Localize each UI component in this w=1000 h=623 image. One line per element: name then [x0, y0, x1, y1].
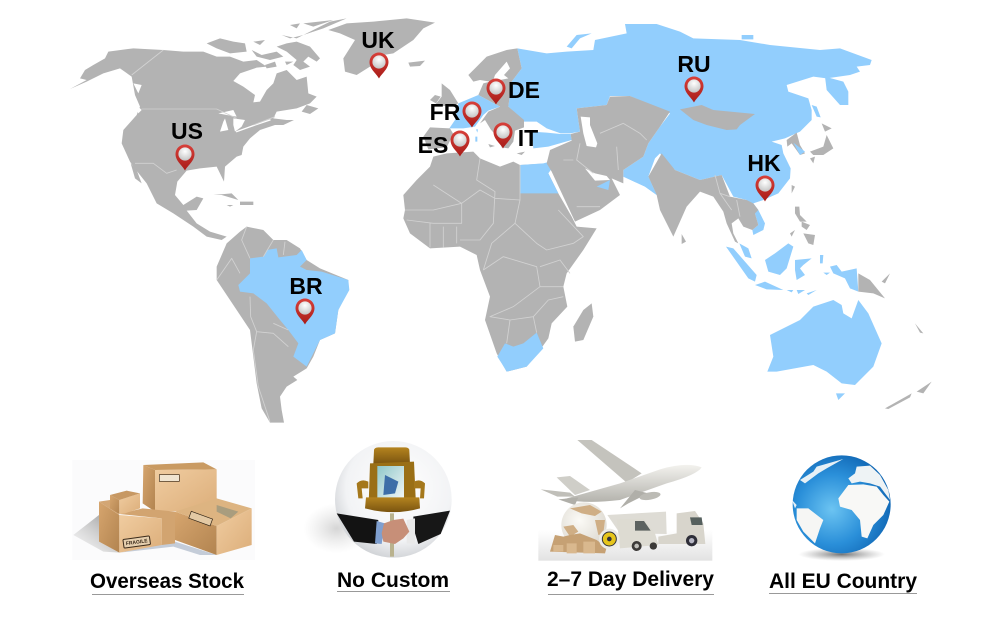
pin: HK — [747, 150, 781, 202]
pin: DE — [486, 77, 540, 104]
pin: BR: BR — [289, 273, 323, 299]
pin: RU: RU — [677, 51, 711, 77]
pin: US — [171, 118, 203, 170]
region: Mongolia — [680, 105, 755, 130]
icon: cardboard boxes — [72, 460, 255, 560]
region: New Zealand — [885, 323, 932, 409]
pin: ES: ES — [418, 132, 448, 158]
region: South Africa — [497, 333, 543, 372]
pin: FR — [430, 99, 482, 128]
pin: RU — [677, 51, 711, 102]
label: fragile sticker — [123, 536, 151, 548]
region: Egypt — [520, 159, 558, 193]
region: Africa — [403, 152, 597, 372]
pin: IT: IT — [518, 125, 538, 151]
world map — [70, 18, 932, 423]
pin: IT — [494, 122, 538, 151]
pin: ES — [418, 130, 470, 158]
region: Papua New Guinea — [858, 273, 890, 298]
region: Korea — [787, 133, 805, 155]
region: Greenland — [328, 18, 435, 75]
pin: US: US — [171, 118, 203, 144]
region: Central Asia and Middle East — [547, 96, 670, 222]
icon: blue globe — [792, 455, 891, 561]
region: North America — [70, 18, 347, 240]
region: Japan, Taiwan and Philippines — [790, 123, 833, 245]
pin: DE: DE — [508, 77, 540, 103]
pin: UK — [361, 27, 395, 78]
region: Indonesia — [726, 243, 858, 295]
pin: FR: FR — [430, 99, 461, 125]
region: Brazil — [238, 248, 349, 367]
region: South America — [217, 227, 349, 423]
label: Overseas Stock: Overseas Stock — [90, 570, 244, 593]
label: No Custom: No Custom — [337, 569, 449, 592]
region: Madagascar — [573, 303, 593, 342]
label: All EU Country: All EU Country — [769, 570, 917, 593]
region: Russia and China — [508, 24, 872, 235]
region: Australia — [767, 300, 882, 400]
pin: BR — [289, 273, 323, 324]
label: 2-7 Day Delivery: 2–7 Day Delivery — [547, 568, 714, 591]
region: base map west and south — [70, 18, 932, 423]
icon: chair and handshake — [303, 441, 452, 558]
region: Europe — [373, 43, 525, 155]
pin: HK: HK — [747, 150, 781, 176]
pin: UK: UK — [361, 27, 395, 53]
icon: plane, truck and parcels — [538, 440, 712, 561]
region: India and Southeast Asia — [623, 153, 758, 244]
label: fragile sticker: FRAGILE — [126, 538, 149, 547]
